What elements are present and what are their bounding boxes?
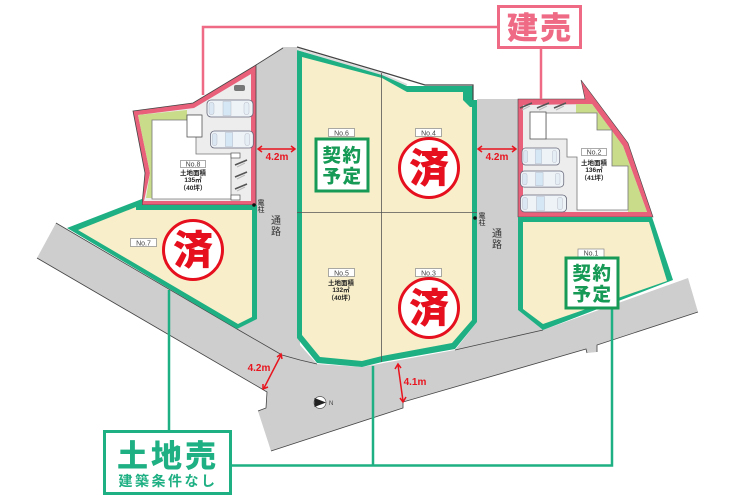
lot: No.2 (built house) (518, 80, 653, 217)
dimension: 4.2m lower road: 4.2m (248, 363, 271, 374)
utility pole left: 柱 (258, 205, 264, 214)
label: land sale (104, 432, 230, 494)
road label right: 通 (492, 228, 502, 240)
lot: No.8 (built house): 土地面積 (180, 168, 206, 177)
lots: No.6, No.4, No.5, No.3 (297, 47, 477, 367)
stamp: sold No.7 (164, 220, 222, 280)
lot: No.2 (built house): 136㎡ (585, 166, 603, 174)
badge: contract pending No.6 (316, 139, 368, 191)
lot: No.1: No.1 (584, 251, 598, 258)
lots: No.6, No.4, No.5, No.3: No.6 (334, 130, 349, 138)
stamp: sold No.3: 済 (409, 287, 449, 331)
lots: No.6, No.4, No.5, No.3: No.3 (421, 270, 436, 278)
lots: No.6, No.4, No.5, No.3: 土地面積 (328, 278, 354, 287)
road network (37, 47, 698, 451)
stamp: sold No.3 (400, 278, 458, 338)
dimension: 4.2m lower road (248, 354, 282, 389)
badge: contract pending No.6: 予定 (322, 166, 363, 187)
lots: No.6, No.4, No.5, No.3: 132㎡ (332, 286, 350, 294)
road label left (271, 215, 281, 238)
lot: No.7 (67, 199, 257, 329)
road label right: 路 (492, 238, 502, 251)
dimension: 4.1m: 4.1m (404, 377, 427, 388)
utility pole right: 柱 (478, 218, 486, 227)
dimension: 4.2m upper right road: 4.2m (486, 152, 509, 163)
stamp: sold No.7: 済 (173, 229, 213, 273)
lot: No.2 (built house): （41坪） (581, 173, 607, 182)
road label left: 路 (271, 225, 281, 238)
road label right (492, 228, 502, 251)
lots: No.6, No.4, No.5, No.3: No.4 (421, 130, 436, 138)
lot: No.8 (built house) (133, 65, 256, 205)
lot: No.8 (built house): 135㎡ (184, 176, 202, 184)
connector lines: built house (203, 27, 541, 99)
road label left: 通 (271, 215, 281, 227)
lots: No.6, No.4, No.5, No.3: No.5 (334, 270, 349, 278)
dimension: 4.2m upper right road (478, 146, 516, 163)
stamp: sold No.4: 済 (409, 147, 449, 191)
dimension: 4.2m upper left road (258, 146, 295, 163)
lot: No.8 (built house): （40坪） (180, 183, 206, 192)
stamp: sold No.4 (400, 138, 458, 198)
lots: No.6, No.4, No.5, No.3: （40坪） (328, 293, 354, 302)
dimension: 4.1m (395, 364, 427, 402)
lot: No.2 (built house): No.2 (587, 150, 601, 156)
lot: No.2 (built house): 土地面積 (581, 158, 608, 167)
badge: contract pending No.6: 契約 (322, 145, 363, 166)
badge: contract pending No.1: 予定 (572, 284, 613, 305)
icon: north compass: N (329, 401, 333, 407)
utility pole right: 電 (478, 212, 486, 220)
lot: No.8 (built house): No.8 (186, 162, 200, 168)
badge: contract pending No.1: 契約 (572, 263, 613, 284)
lot: No.7: No.7 (136, 240, 151, 248)
icon: north compass (314, 396, 333, 408)
utility pole left: 電 (258, 199, 264, 207)
connector lines: land sale (169, 290, 612, 466)
badge: contract pending No.1 (566, 258, 618, 308)
label: built house: 建売 (507, 11, 573, 46)
label: built house (498, 6, 580, 48)
lot: No.1 (518, 217, 673, 330)
label: land sale: 土地売 (117, 439, 219, 474)
label: land sale: 建築条件なし (118, 473, 218, 489)
utility pole right (473, 212, 486, 227)
dimension: 4.2m upper left road: 4.2m (266, 152, 289, 163)
utility pole left (252, 199, 264, 214)
